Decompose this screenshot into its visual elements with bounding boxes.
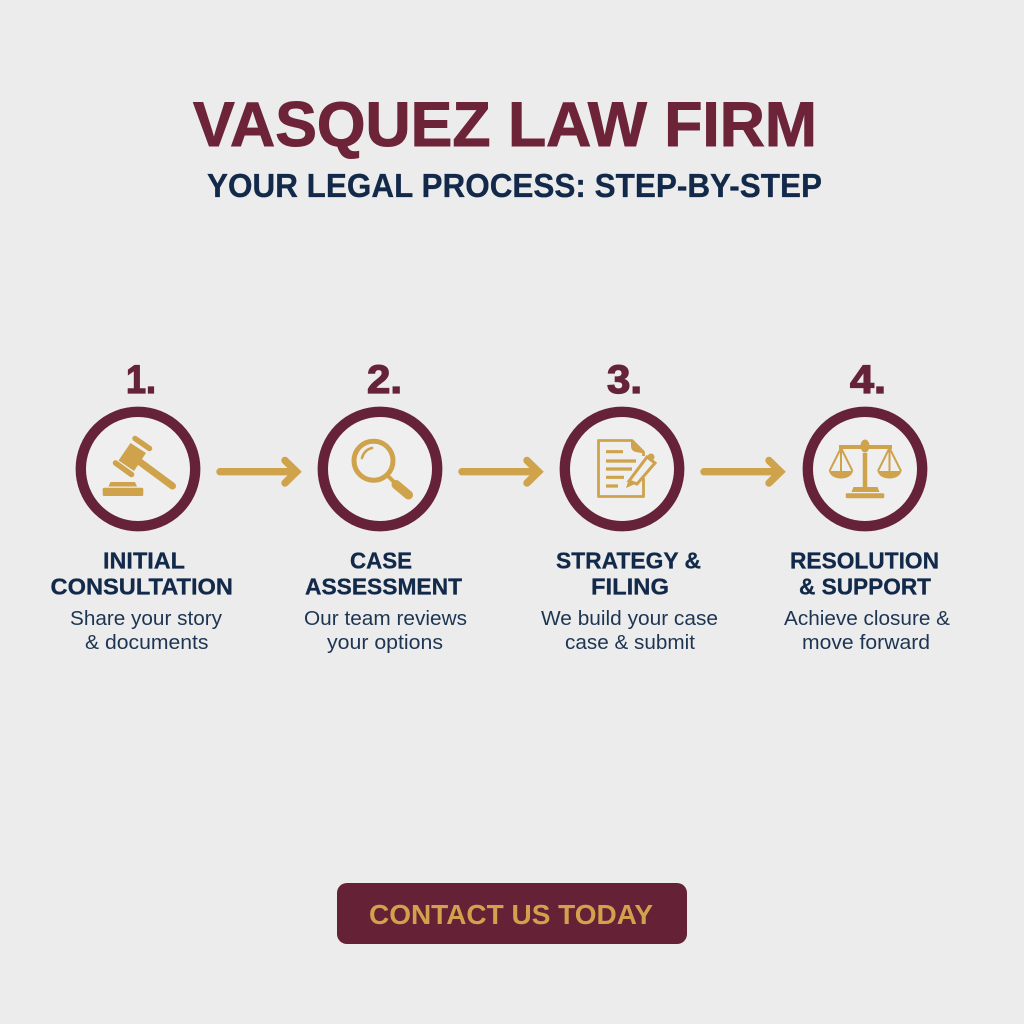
step 1 heading: CONSULTATION [50,574,233,600]
call-to-action button: CONTACT US TODAY [369,899,653,930]
subtitle: YOUR LEGAL PROCESS: STEP-BY-STEP [207,167,822,204]
step 3 [541,358,718,654]
arrow 1 [220,460,296,483]
step 2 [304,358,467,654]
step 4 heading [790,548,939,600]
step 2 heading [305,548,462,600]
step 4 description [784,607,950,654]
step 1 ring [81,412,195,526]
step 1 heading [50,548,233,600]
step 1 description: Share your story [70,607,223,630]
step 1 number: 1. [126,358,156,402]
step 1 [50,358,233,654]
step 2 ring [323,412,437,526]
step 4 heading: & SUPPORT [799,574,931,600]
step 2 description [304,607,467,654]
step 2 heading: ASSESSMENT [305,574,462,600]
step 3 ring [565,412,679,526]
step 4 description: move forward [802,631,930,654]
step 3 description: case & submit [565,631,695,654]
icon: scales of justice [829,440,902,498]
step 2 description: your options [327,631,443,654]
step 3 heading: FILING [591,574,669,600]
step 4 description: Achieve closure & [784,607,950,630]
icon: document and pen [598,440,655,496]
call-to-action button [337,883,687,944]
step 4 [784,358,950,654]
step 2 number: 2. [367,358,402,402]
step 4 number: 4. [850,358,886,402]
step 3 heading: STRATEGY & [556,548,701,574]
step 3 number: 3. [607,358,642,402]
step 1 description: & documents [85,631,208,654]
icon: magnifying glass [354,441,408,495]
icon: gavel [103,438,172,496]
arrow 3 [704,460,780,483]
arrow 2 [462,460,538,483]
step 3 description: We build your case [541,607,718,630]
step 4 ring [808,412,922,526]
step 2 description: Our team reviews [304,607,467,630]
step 3 heading [556,548,701,600]
step 2 heading: CASE [350,548,412,574]
step 4 heading: RESOLUTION [790,548,939,574]
step 3 description [541,607,718,654]
step 1 heading: INITIAL [103,548,185,574]
title: VASQUEZ LAW FIRM [193,90,817,160]
step 1 description [70,607,223,654]
